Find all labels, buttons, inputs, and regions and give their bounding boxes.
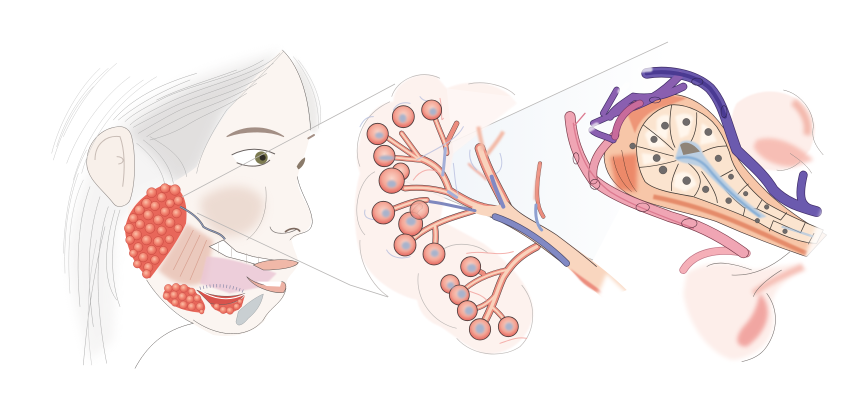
icon: eye: [232, 149, 305, 169]
gland: parotid: [124, 184, 225, 278]
zoom cone: lobule to acinus: [390, 42, 668, 260]
panel: face with salivary glands: [52, 50, 321, 368]
acini centres: [375, 108, 513, 334]
lower acinus background: [683, 252, 807, 362]
fade at right end of duct: [803, 207, 846, 267]
secretory cells: [637, 105, 823, 244]
lobe background: [355, 75, 533, 354]
connecting artery lower branch: [683, 251, 747, 270]
panel: acinus cross-section: [570, 69, 846, 362]
nuclei: [629, 118, 787, 234]
main duct trunk: [468, 127, 637, 313]
right acinus background: [731, 90, 823, 173]
ductal lumen: [675, 141, 813, 237]
face skin: [128, 50, 314, 368]
duct branches: [383, 113, 543, 330]
hair mass: [69, 50, 318, 360]
zoom lines: [182, 42, 668, 297]
panel: salivary lobule and ducts: [355, 75, 637, 354]
gland: submandibular and sublingual: [163, 283, 263, 325]
acini: [367, 100, 518, 340]
mouth: tongue, teeth, lips: [200, 240, 298, 293]
outer lobule layer: [604, 94, 827, 257]
artery: [570, 113, 743, 253]
hair strands: [52, 52, 321, 365]
masseter muscle: [158, 223, 213, 285]
veins: [588, 69, 817, 212]
blue vessels: [360, 97, 567, 343]
icon: ear: [87, 127, 135, 207]
